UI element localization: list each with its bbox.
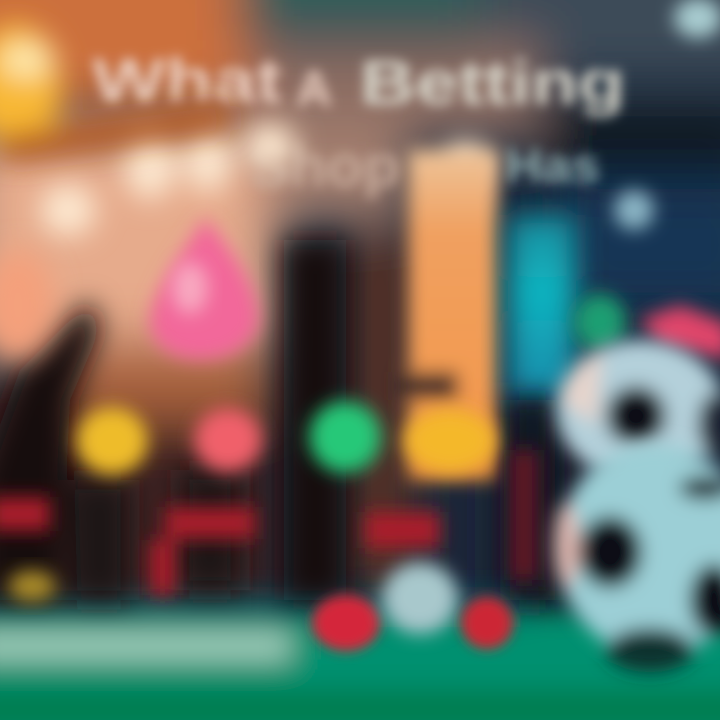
heading: blurred title: Has: [505, 140, 600, 193]
icon: pink drop: [150, 218, 258, 360]
red chairs: [0, 450, 538, 595]
icon: red ball right: [461, 597, 513, 649]
lower soccer ball: [554, 444, 720, 672]
heading: blurred title: Betting: [360, 49, 625, 118]
icon: red circle: [194, 408, 262, 472]
heading: blurred title: A: [296, 61, 332, 117]
heading: blurred title: [92, 47, 625, 199]
glow: rosy left edge: [0, 250, 54, 360]
icon: dim yellow token: [8, 570, 56, 602]
icon: pink ribbon right: [640, 305, 720, 360]
column: dark: [284, 240, 346, 600]
icon: red ball left: [312, 595, 380, 651]
icon: yellow circle: [76, 407, 148, 475]
icon: green circle: [309, 401, 381, 473]
icon: highlight on drop: [172, 262, 208, 314]
upper soccer ball: [556, 340, 720, 480]
column: teal: [508, 215, 576, 400]
lights: row of warm lamps: [40, 123, 488, 236]
heading: blurred title: Shop: [250, 134, 400, 199]
icon: white ball: [382, 562, 458, 634]
icon: glowing orange sign top left: [0, 23, 231, 162]
icon: amber circle: [404, 409, 496, 473]
figure: dark silhouette left: [0, 300, 555, 600]
icon: green token right: [574, 294, 626, 350]
floor: green table: [0, 596, 720, 720]
icon: small lights top right: [614, 0, 720, 230]
heading: blurred title: What: [92, 47, 282, 116]
column: orange: [400, 150, 498, 480]
